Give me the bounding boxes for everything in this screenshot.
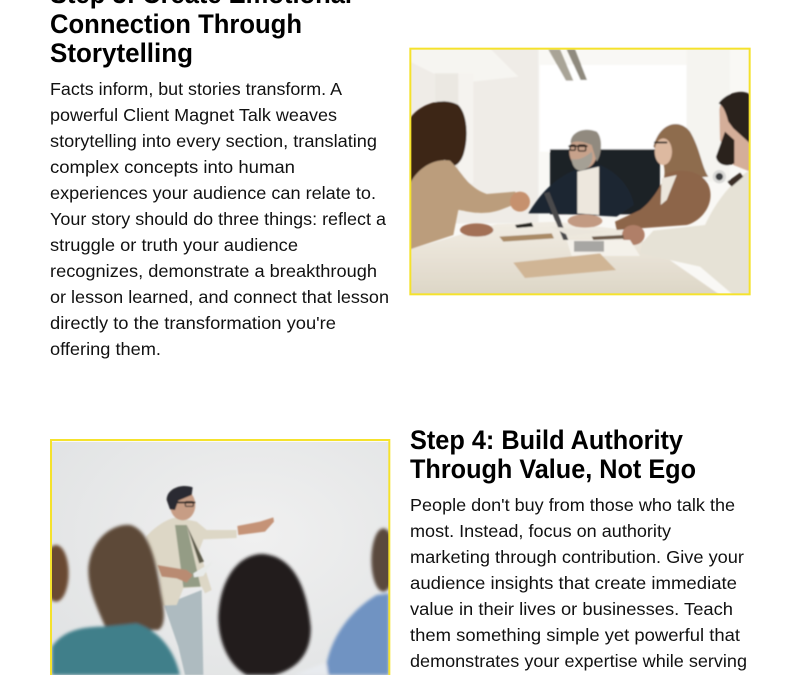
text block: step 3 body: experiences your audience can relate to.: [50, 183, 376, 203]
presenter: [164, 590, 203, 675]
text block: step 4 body: marketing through contribution. Give your: [410, 547, 744, 567]
text block: step 4 body: value in their lives or businesses. Teach: [410, 599, 733, 619]
text block: step 3 body: directly to the transformation you're: [50, 313, 336, 333]
audience left edge: [52, 542, 72, 604]
text block: step 4 body: them something simple yet powerful that: [410, 625, 740, 645]
text block: step 3 body: recognizes, demonstrate a breakthrough: [50, 261, 377, 281]
text block: step 3 body: [50, 79, 389, 359]
text block: step 4 body: audience insights that create immediate: [410, 573, 737, 593]
text block: step 3 body: powerful Client Magnet Talk weaves: [50, 105, 337, 125]
heading: step 4: Step 4: Build Authority: [410, 425, 683, 455]
text block: step 3 body: Facts inform, but stories transform. A: [50, 79, 342, 99]
audience dark bob: [218, 554, 311, 675]
text block: step 3 body: storytelling into every section, translating: [50, 131, 377, 151]
text block: step 4 body: People don't buy from those who talk the: [410, 495, 735, 515]
text block: step 3 body: or lesson learned, and connect that lesson: [50, 287, 389, 307]
heading: step 4: Through Value, Not Ego: [410, 454, 696, 484]
text block: step 3 body: complex concepts into human: [50, 157, 295, 177]
heading: step 3: Connection Through: [50, 9, 302, 39]
right man: [719, 93, 750, 172]
photo: presenter speaking to an audience: [43, 440, 395, 675]
handshake: [510, 192, 530, 212]
text block: step 3 body: Your story should do three things: reflect a: [50, 209, 386, 229]
text block: step 4 body: demonstrates your expertise while serving: [410, 651, 747, 671]
left woman: [410, 101, 467, 183]
heading: step 3: Storytelling: [50, 38, 193, 68]
heading: step 4: [410, 425, 696, 484]
audience right: [371, 528, 395, 592]
audience long hair: [88, 525, 164, 630]
laptop and notebooks: [544, 192, 568, 240]
text block: step 4 body: [410, 495, 747, 671]
center man: [528, 165, 634, 217]
text block: step 3 body: offering them.: [50, 339, 161, 359]
photo: business meeting handshake: [410, 48, 750, 295]
right woman: [653, 124, 708, 180]
heading: step 3: [50, 0, 352, 68]
text block: step 3 body: struggle or truth your audience: [50, 235, 298, 255]
text block: step 4 body: most. Instead, focus on authority: [410, 521, 671, 541]
